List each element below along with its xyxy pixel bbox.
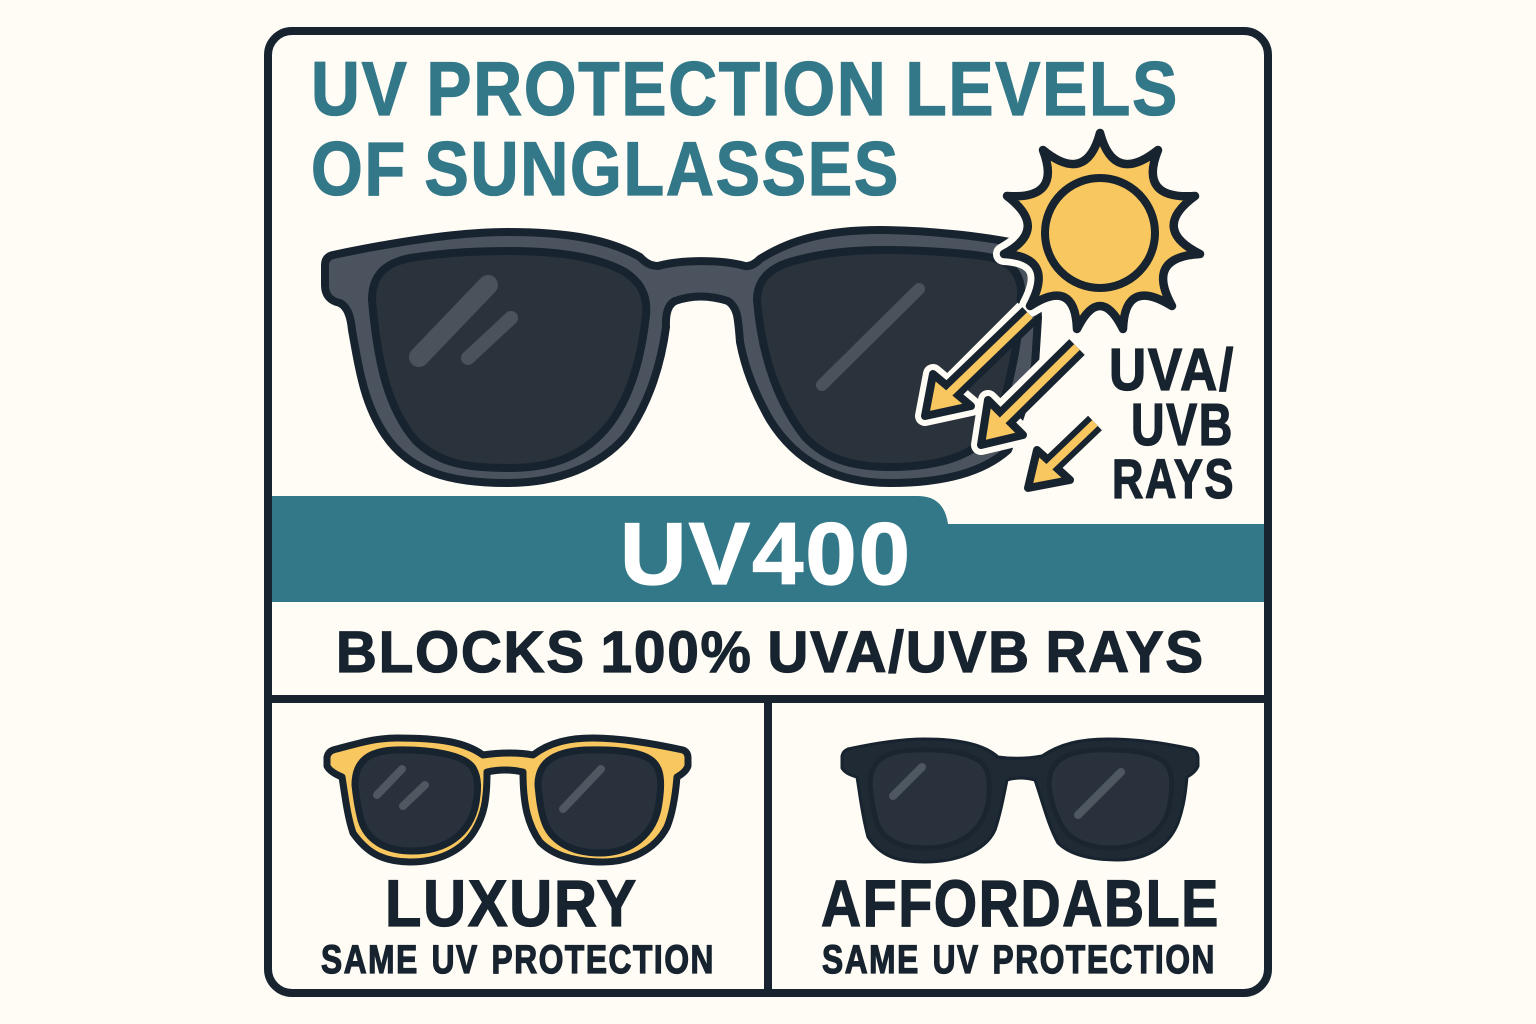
- divider: horizontal: [272, 695, 1264, 703]
- title: [311, 47, 1179, 212]
- left lens: [372, 251, 646, 468]
- illustration: large sunglasses: [325, 230, 1038, 483]
- label: UVA/UVB rays: UVB: [1131, 392, 1234, 458]
- arrow: UV ray 3: [1028, 423, 1095, 488]
- label: UVA/UVB rays: RAYS: [1112, 447, 1235, 510]
- arrow: UV ray 2: [981, 341, 1077, 445]
- banner: UV400: UV400: [620, 504, 912, 603]
- icon: black sunglasses: [842, 739, 1198, 862]
- title: OF SUNGLASSES: [311, 127, 900, 212]
- frame: [325, 230, 1038, 483]
- icon: sun: [1004, 133, 1200, 329]
- icon: gold sunglasses: [327, 738, 688, 862]
- panel: affordable: [821, 739, 1220, 982]
- label: luxury: LUXURY: [385, 866, 638, 940]
- banner: UV400: [272, 496, 1264, 603]
- label: affordable: AFFORDABLE: [821, 866, 1220, 940]
- panel: luxury: [321, 738, 715, 982]
- lens highlights: [419, 285, 919, 385]
- caption: luxury: SAME UV PROTECTION: [321, 938, 715, 982]
- arrow: UV ray 1: [925, 309, 1030, 416]
- panel: outer frame: [268, 31, 1268, 993]
- text: blocks 100%: BLOCKS 100% UVA/UVB RAYS: [336, 620, 1205, 685]
- divider: vertical: [764, 698, 772, 993]
- title: UV PROTECTION LEVELS: [311, 47, 1179, 132]
- label: UVA/UVB rays: [1109, 337, 1235, 510]
- caption: affordable: SAME UV PROTECTION: [822, 938, 1216, 982]
- label: UVA/UVB rays: UVA/: [1109, 337, 1235, 403]
- right lens: [757, 250, 1021, 467]
